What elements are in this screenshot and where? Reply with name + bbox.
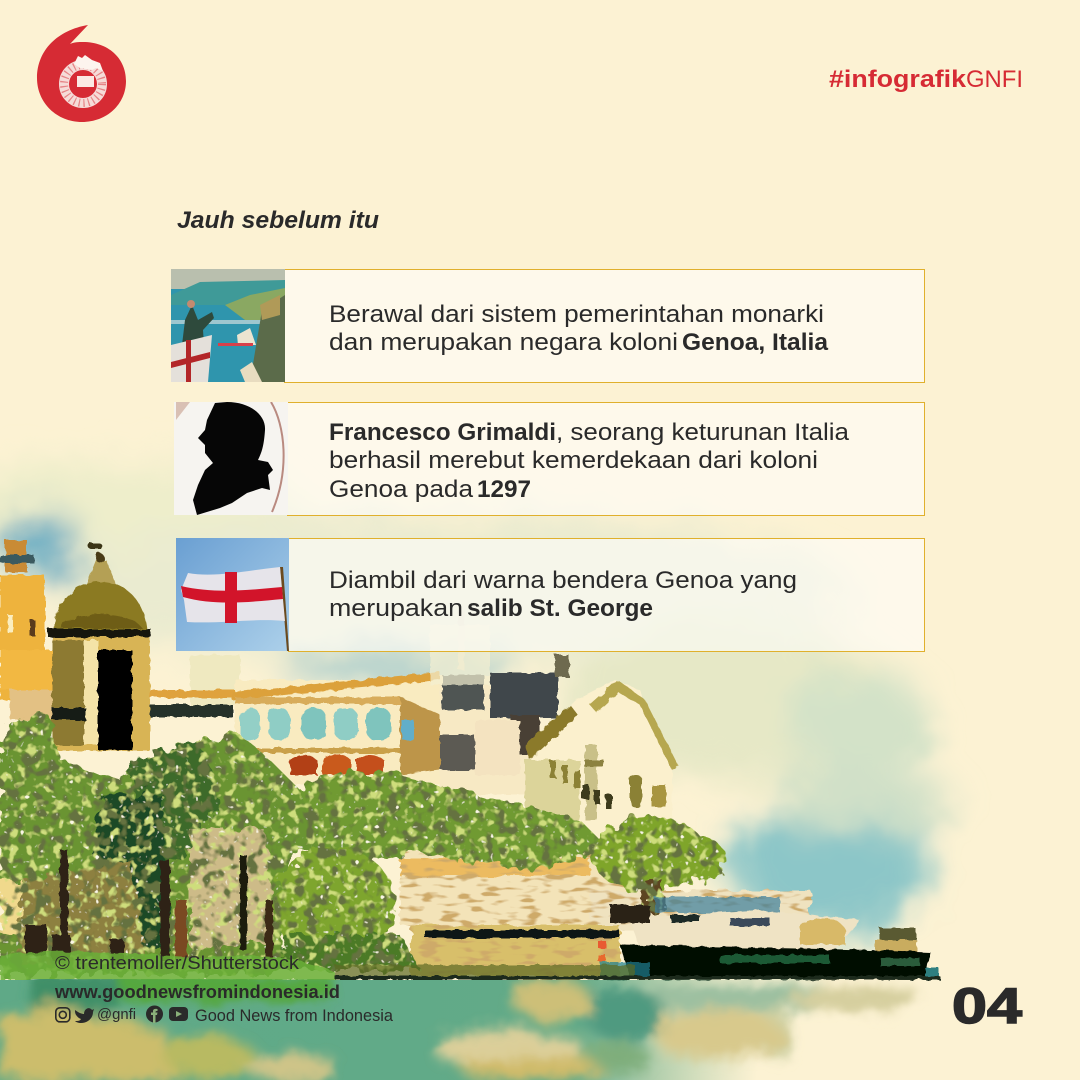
watch tower with dome [48,543,151,751]
back building and wall [148,655,440,785]
hashtag: GNFI [966,66,1023,93]
icon: youtube [169,1007,188,1021]
foliage left and centre [0,712,610,975]
photo: silhouette [174,402,288,515]
text: St George flag: Diambil dari warna bendera Genoa yang [329,567,797,594]
green tree [592,817,725,915]
lower stone wall and terrace [400,850,810,977]
text: Francesco Grimaldi: , seorang keturunan Italia [556,419,850,446]
text: monarchy: Genoa, Italia [682,329,829,356]
text: monarchy: Berawal dari sistem pemerintahan monarki [329,301,824,328]
icon: instagram [56,1008,70,1022]
foreground bush [270,847,420,970]
white palace [525,680,678,850]
text: Francesco Grimaldi: Genoa pada [329,476,474,503]
logo GNFI [37,25,126,122]
website: www.goodnewsfromindonesia.id [54,982,340,1002]
icon: facebook [146,1006,163,1023]
handle: @gnfi [97,1006,136,1023]
text: Francesco Grimaldi: Francesco Grimaldi [329,419,556,446]
hashtag [829,66,1023,93]
text: Francesco Grimaldi [329,419,850,503]
grey buildings [430,610,569,795]
stone ruin and trunks [0,830,275,965]
panel: St George flag [176,538,924,652]
photo: Genoa ship [171,269,285,382]
tree trunks [25,850,273,965]
text: St George flag: salib St. George [467,595,653,622]
icon: twitter [75,1008,94,1023]
bright green shore [0,951,335,980]
yellow baroque tower [0,540,52,720]
text: Francesco Grimaldi: 1297 [477,476,531,503]
text: Francesco Grimaldi: berhasil merebut kemerdekaan dari koloni [329,447,818,474]
hashtag: #infografik [829,66,967,93]
panel: Francesco Grimaldi [174,402,924,516]
text: monarchy [329,301,829,356]
heading: Jauh sebelum itu [177,207,379,234]
text: St George flag: merupakan [329,595,463,622]
dock and boats [335,897,940,980]
water [0,972,920,1080]
text: monarchy: dan merupakan negara koloni [329,329,678,356]
panel: monarchy [171,269,924,382]
page name: Good News from Indonesia [195,1006,394,1025]
page number: 04 [952,978,1022,1034]
watercolor landscape illustration [0,460,950,1080]
photo: flag [176,538,289,651]
social footer [56,1006,394,1025]
sky wash [0,460,950,935]
photo credit: © trentemoller/Shutterstock [55,953,300,973]
text: St George flag [329,567,797,622]
